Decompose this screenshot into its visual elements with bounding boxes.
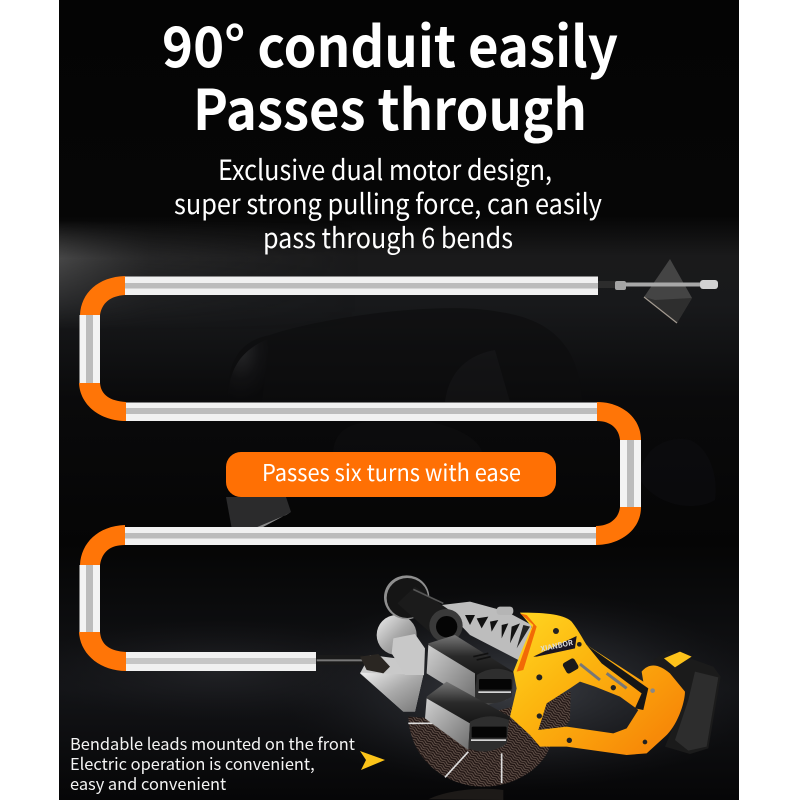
orange elbow 4 xyxy=(596,507,641,545)
orange elbow 1 xyxy=(80,276,125,315)
bottom caption: Bendable leads mounted on the front xyxy=(70,731,355,755)
front cable guide xyxy=(317,654,423,712)
pulling head on cable end xyxy=(598,259,718,323)
side handle xyxy=(384,575,463,642)
conduit pipe with six bends xyxy=(79,276,641,671)
bottom caption xyxy=(70,731,355,795)
wire coil xyxy=(408,692,571,787)
silver gear housing xyxy=(377,615,425,675)
title: Passes through xyxy=(193,66,587,147)
coil binding wires xyxy=(408,723,502,783)
orange elbow 3 xyxy=(597,402,641,440)
yellow tool body with handle loop xyxy=(510,613,685,755)
title xyxy=(162,3,618,147)
battery pack xyxy=(653,651,721,754)
bottom caption: easy and convenient xyxy=(70,771,226,795)
pipe segment 2 xyxy=(126,402,597,421)
subtitle: Exclusive dual motor design, xyxy=(218,149,552,189)
silver vent frame xyxy=(442,602,532,660)
callout: passes six turns xyxy=(226,452,556,497)
background prism lower xyxy=(226,497,291,534)
subtitle xyxy=(174,149,602,257)
bottom caption: Electric operation is convenient, xyxy=(70,751,315,775)
icon: yellow arrow xyxy=(360,751,385,770)
orange elbow 5 xyxy=(80,525,125,565)
vertical pipe right xyxy=(620,440,641,507)
orange elbow 2 xyxy=(79,383,126,421)
callout: passes six turns: Passes six turns with ease xyxy=(262,454,521,488)
yellow tool body with handle loop: XIANBOR xyxy=(540,637,574,655)
orange elbow 6 xyxy=(79,632,126,671)
title: 90° conduit easily xyxy=(162,3,618,84)
coil reflection xyxy=(428,789,503,800)
pipe segment 4 xyxy=(126,652,316,671)
subtitle: super strong pulling force, can easily xyxy=(174,183,602,223)
vertical pipe left upper xyxy=(80,315,100,383)
subtitle: pass through 6 bends xyxy=(263,217,513,257)
pipe segment 1 xyxy=(125,276,598,295)
cable tool machine xyxy=(317,575,721,800)
lower motor xyxy=(425,682,510,752)
pipe segment 3 xyxy=(125,527,596,545)
background dark blobs xyxy=(228,308,716,506)
vertical pipe left lower xyxy=(80,565,100,632)
upper motor xyxy=(427,635,514,705)
